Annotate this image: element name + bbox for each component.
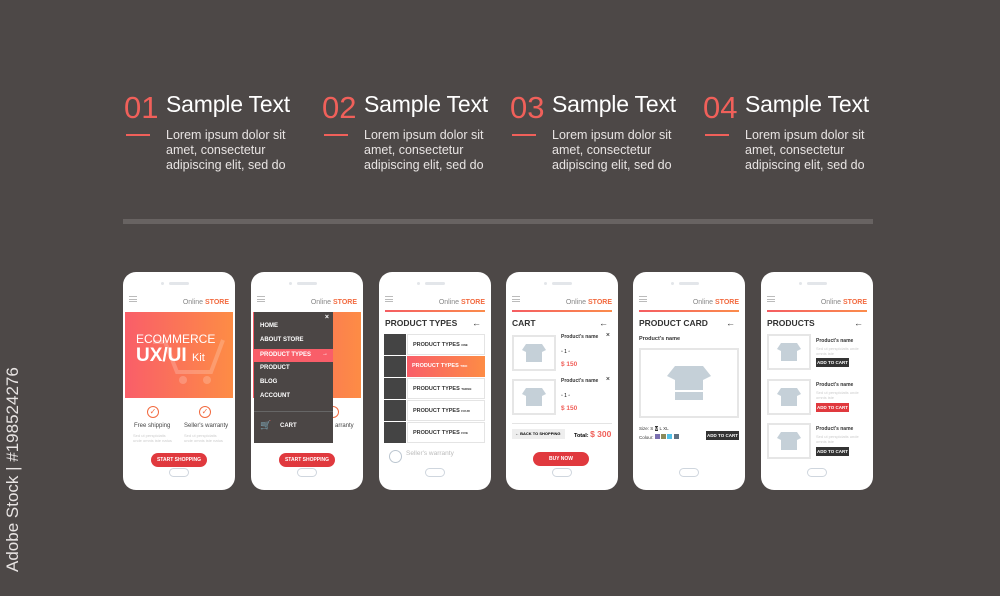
phone 1: home: Sed ut perspiciatis unde omnis iste natus xyxy=(133,433,172,443)
step 03: Lorem ipsum dolor sit amet, consectetur adipiscing elit, sed do xyxy=(552,128,672,172)
vertical watermark caption: Adobe Stock | #198524276 xyxy=(3,367,22,572)
phone 1: home xyxy=(123,272,235,490)
menu panel: 🛒 xyxy=(260,420,271,430)
phone 6: products: ADD TO CART xyxy=(817,405,848,410)
phone 6: products: Sed ut perspiciatis unde omnis iste xyxy=(816,434,859,444)
phone 6: products: Sed ut perspiciatis unde omnis iste xyxy=(816,346,859,356)
list rows xyxy=(384,334,485,443)
phone 4: cart: $ 150 xyxy=(561,405,577,412)
phone 2: menu: START SHOPPING xyxy=(285,457,329,463)
phone 3: product types: Seller's warranty xyxy=(406,450,454,457)
phone 5: product card: Colour: xyxy=(639,435,654,440)
phone 5: product card: ADD TO CART xyxy=(707,433,738,438)
menu panel: BLOG xyxy=(260,379,277,385)
step 01: 01 xyxy=(124,90,158,125)
step 02: Sample Text xyxy=(364,91,488,117)
phone 6: products xyxy=(761,272,873,490)
list rows: PRODUCT TYPES ONE xyxy=(413,342,468,348)
banner xyxy=(125,312,233,398)
step 03 xyxy=(510,90,676,172)
phone 4: cart: ▫ 1 ▫ xyxy=(561,393,570,399)
button: START SHOPPING xyxy=(157,457,201,463)
phone 6: products: PRODUCTS xyxy=(767,318,815,328)
phone 4: cart: CART xyxy=(512,318,536,328)
phone 4: cart: BUY NOW xyxy=(549,456,573,462)
phone 4: cart: × xyxy=(606,376,610,383)
phone 5: product card: Size: S M L XL xyxy=(639,426,669,431)
phone 6: products: Sed ut perspiciatis unde omnis iste xyxy=(816,390,859,400)
menu panel: × xyxy=(325,314,329,321)
phone 1: home: Online STORE xyxy=(183,299,229,306)
step 04: Sample Text xyxy=(745,91,869,117)
step 04: Lorem ipsum dolor sit amet, consectetur adipiscing elit, sed do xyxy=(745,128,865,172)
phone 3: product types: ← xyxy=(472,318,481,328)
step 04: 04 xyxy=(703,90,737,125)
phone 3: product types: Online STORE xyxy=(439,299,485,306)
phone 6: products: ADD TO CART xyxy=(817,449,848,454)
phone 2: menu xyxy=(251,272,363,490)
phone 2: menu: Online STORE xyxy=(311,299,357,306)
phone 4: cart: × xyxy=(606,332,610,339)
phone 4: cart: Total: $ 300 xyxy=(574,429,611,439)
step 02: 02 xyxy=(322,90,356,125)
menu panel: HOME xyxy=(260,323,278,329)
phone 5: product card xyxy=(633,272,745,490)
phone 5: product card: ← xyxy=(726,318,735,328)
phone 4: cart: $ 150 xyxy=(561,361,577,368)
phone 6: products: ← xyxy=(854,318,863,328)
list rows: PRODUCT TYPES FIVE xyxy=(413,430,468,436)
menu panel: ABOUT STORE xyxy=(260,337,304,343)
list rows: PRODUCT TYPES TWO xyxy=(412,363,467,369)
phone 4: cart: Product's name xyxy=(561,378,598,384)
list rows: PRODUCT TYPES FOUR xyxy=(413,408,470,414)
phone 4: cart: Product's name xyxy=(561,334,598,340)
step 03: 03 xyxy=(510,90,544,125)
phone 2: menu: arranty xyxy=(335,423,354,429)
step 02: Lorem ipsum dolor sit amet, consectetur adipiscing elit, sed do xyxy=(364,128,484,172)
phone 6: products: ADD TO CART xyxy=(817,360,848,365)
phone 6: products: Product's name xyxy=(816,382,853,388)
step 01 xyxy=(124,90,290,172)
banner: ECOMMERCE xyxy=(136,332,215,346)
phone 4: cart: ▫ 1 ▫ xyxy=(561,349,570,355)
feature icons xyxy=(147,406,159,418)
phone 5: product card: PRODUCT CARD xyxy=(639,318,708,328)
phone 5: product card: Product's name xyxy=(639,336,680,342)
phone 3: product types xyxy=(379,272,491,490)
phone 1: home: Free shipping xyxy=(134,423,170,429)
button xyxy=(151,453,207,467)
phone 1: home: Seller's warranty xyxy=(184,423,228,429)
phone 4: cart: ← BACK TO SHOPPING xyxy=(515,431,560,436)
step 01: Lorem ipsum dolor sit amet, consectetur adipiscing elit, sed do xyxy=(166,128,286,172)
phone 6: products: Product's name xyxy=(816,426,853,432)
step 04 xyxy=(703,90,869,172)
phone 1: home: ✓ xyxy=(202,407,208,416)
phone 6: products: Product's name xyxy=(816,338,853,344)
step 03: Sample Text xyxy=(552,91,676,117)
step 02 xyxy=(322,90,488,172)
menu panel: PRODUCT TYPES xyxy=(260,352,311,358)
menu panel: → xyxy=(322,351,328,357)
menu panel xyxy=(254,312,333,443)
phone 6: products: Online STORE xyxy=(821,299,867,306)
phone 5: product card: Online STORE xyxy=(693,299,739,306)
phone 4: cart xyxy=(506,272,618,490)
step 01: Sample Text xyxy=(166,91,290,117)
banner: UX/UI Kit xyxy=(136,345,205,366)
menu panel: PRODUCT xyxy=(260,365,290,371)
menu panel: ACCOUNT xyxy=(260,393,290,399)
feature icons: ✓ xyxy=(150,407,156,416)
phone 3: product types: PRODUCT TYPES xyxy=(385,318,457,328)
phone 4: cart: ← xyxy=(599,318,608,328)
phone 1: home: Sed ut perspiciatis unde omnis iste natus xyxy=(184,433,223,443)
menu panel: CART xyxy=(280,423,297,429)
list rows: PRODUCT TYPES THREE xyxy=(413,386,471,392)
phone 4: cart: Online STORE xyxy=(566,299,612,306)
